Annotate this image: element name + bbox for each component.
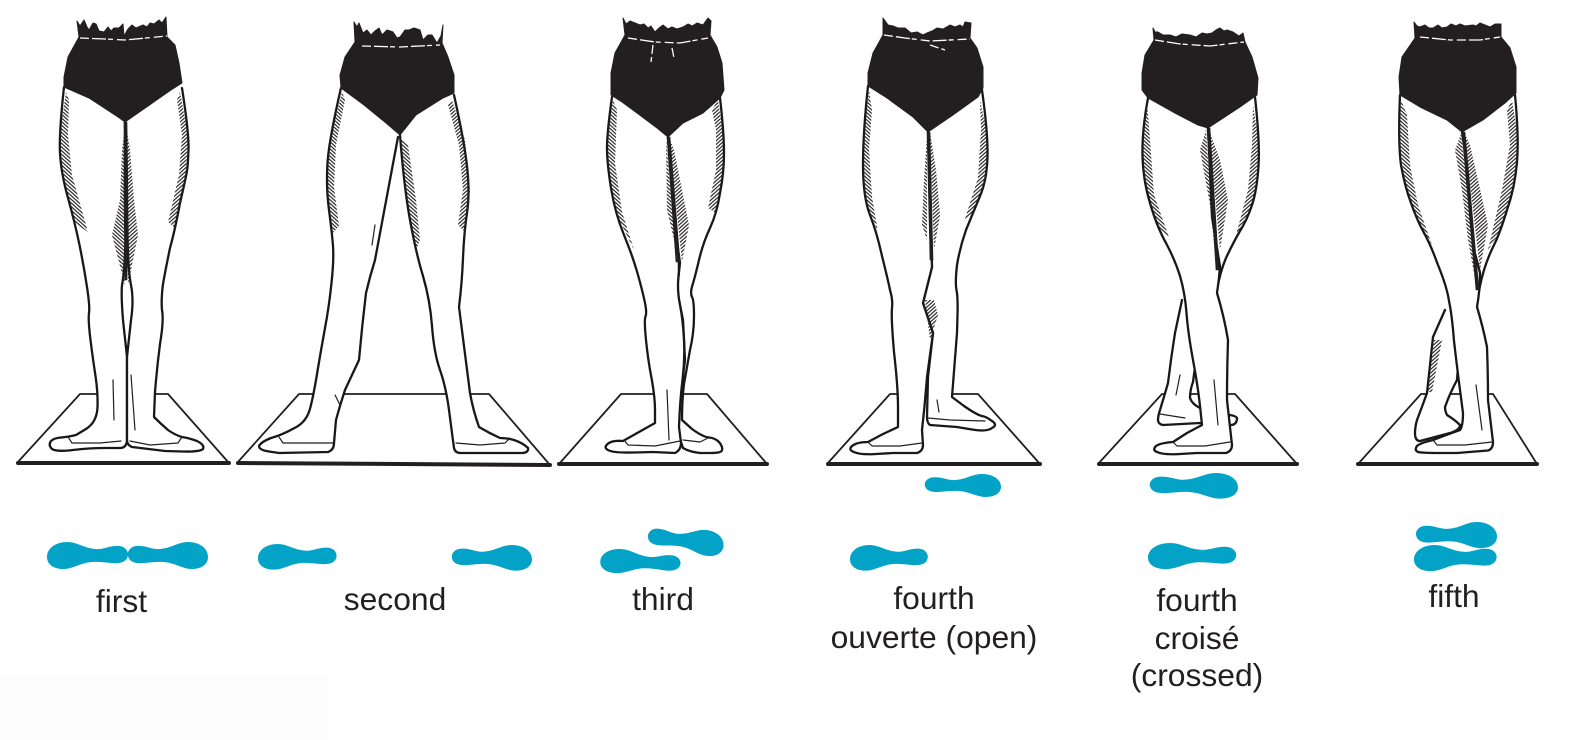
briefs <box>868 18 983 132</box>
back leg lower <box>1158 300 1237 425</box>
label: third: third <box>632 581 694 617</box>
label: fourth ouverte: ouverte (open) <box>831 619 1037 655</box>
front leg <box>850 86 933 454</box>
footprints: fourth open <box>850 474 1001 571</box>
footprints: first <box>47 542 208 569</box>
figure: fourth position open <box>827 18 1040 464</box>
floor square <box>1358 394 1537 464</box>
figure: third position <box>559 18 767 464</box>
label: fourth croisé: croisé <box>1155 620 1239 656</box>
floor square <box>827 394 1040 464</box>
footprints: second <box>258 544 532 571</box>
leg shading <box>279 92 510 445</box>
label: fourth ouverte: fourth <box>893 580 975 616</box>
figure: second position <box>237 22 550 465</box>
floor square <box>17 394 229 463</box>
front leg <box>1142 98 1232 454</box>
leg shading <box>1399 100 1518 445</box>
footprints: third <box>600 524 725 576</box>
leg shading <box>608 100 723 446</box>
label: fifth: fifth <box>1428 578 1480 614</box>
label: fourth croisé <box>1131 582 1263 693</box>
floor square <box>559 394 767 464</box>
briefs <box>611 18 724 137</box>
briefs <box>64 17 182 122</box>
right leg <box>400 95 528 453</box>
back thigh <box>1462 95 1518 303</box>
figure: first position <box>17 17 229 463</box>
figure: fourth position crossed <box>1098 28 1297 464</box>
leg shading <box>60 92 188 445</box>
briefs <box>1142 28 1258 128</box>
back leg <box>923 90 995 430</box>
left leg <box>50 87 127 451</box>
leg shading <box>864 90 987 446</box>
label: second: second <box>344 581 446 617</box>
right leg <box>125 88 203 452</box>
label: fourth ouverte <box>831 580 1037 655</box>
briefs <box>340 22 454 135</box>
footprints: fourth crossed <box>1148 473 1238 569</box>
floor square <box>1098 394 1297 464</box>
back leg lower <box>1415 310 1460 441</box>
label: first: first <box>96 583 147 619</box>
front leg <box>606 97 684 453</box>
back thigh <box>1208 97 1259 290</box>
floor square <box>237 394 550 465</box>
figure: fifth position <box>1358 22 1537 464</box>
label: fourth croisé: (crossed) <box>1131 657 1263 693</box>
front leg <box>1399 95 1493 453</box>
leg shading <box>1143 102 1259 446</box>
footprints: fifth <box>1414 522 1497 571</box>
back leg <box>668 98 724 453</box>
label: fourth croisé: fourth <box>1156 582 1238 618</box>
left leg <box>259 88 398 453</box>
briefs <box>1399 22 1516 132</box>
